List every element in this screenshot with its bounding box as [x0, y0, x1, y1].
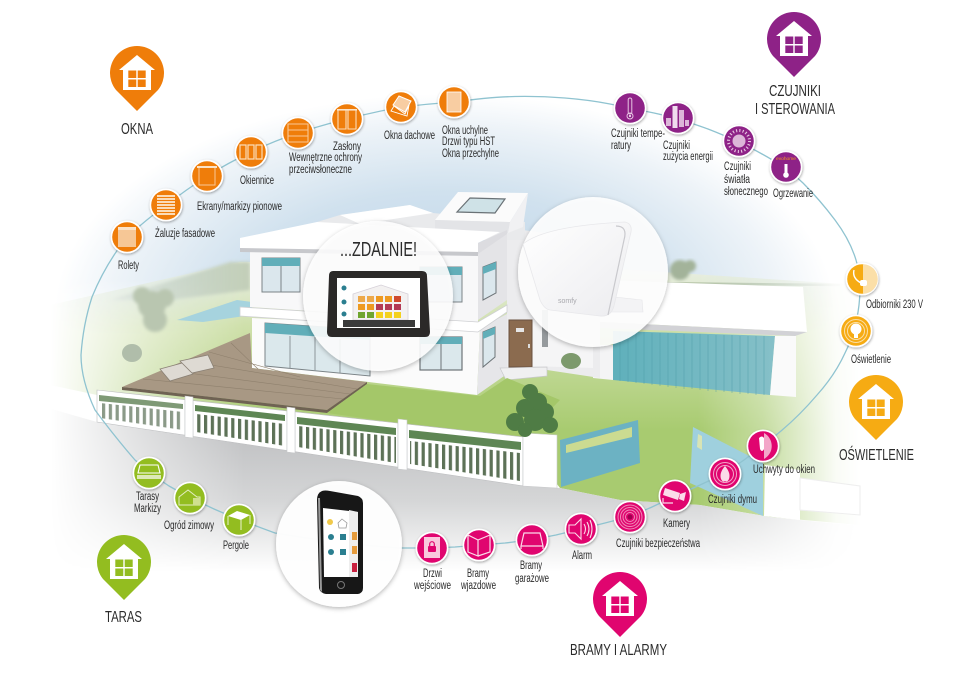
title: CZUJNIKI I STEROWANIA: CZUJNIKI — [769, 83, 821, 100]
label: Alarm: Alarm — [572, 550, 592, 562]
logo: somfy: somfy — [558, 298, 577, 305]
icon: czujnik światła słonecznego — [722, 124, 756, 158]
skylight block — [435, 192, 528, 233]
callout circle: receiver — [518, 197, 668, 347]
road — [74, 416, 810, 558]
gate right — [690, 427, 763, 516]
icon: czujniki dymu — [708, 458, 742, 490]
label: Zasłony Wewnętrzne ochrony przeciwsłoneczne: przeciwsłoneczne — [289, 164, 352, 176]
lower right window — [420, 337, 462, 370]
garage — [593, 280, 807, 397]
label: Rolety: Rolety — [118, 260, 139, 272]
icon: wewnętrzne ochrony — [282, 116, 314, 150]
icon: okna dachowe — [384, 90, 418, 124]
gate left — [560, 420, 640, 487]
label: Ogród zimowy: Ogród zimowy — [164, 520, 214, 532]
smartphone — [317, 490, 363, 594]
icon: czujniki bezpieczeństwa — [614, 500, 646, 534]
terrace deck — [122, 333, 367, 413]
small shrub by door — [561, 353, 581, 369]
icon: tarasy markizy — [132, 456, 166, 490]
tree left — [133, 287, 174, 332]
label: Odbiorniki 230 V: Odbiorniki 230 V — [866, 299, 923, 311]
title: OKNA: OKNA — [121, 121, 153, 138]
label: Okna uchylne Drzwi typu HST Okna przechylne: Drzwi typu HST — [442, 136, 495, 148]
label: Czujniki temperatury — [611, 128, 665, 152]
icon: pergole — [222, 504, 256, 536]
pink group: bramy i alarmy — [413, 430, 815, 592]
label: Czujniki zużycia energii — [663, 140, 713, 163]
icon: żaluzje — [150, 188, 182, 222]
fence — [97, 390, 557, 488]
label: Bramy garażowe: garażowe — [515, 573, 549, 585]
title: TARAS: TARAS — [105, 609, 142, 626]
lawn — [50, 262, 860, 525]
garage left pier — [593, 345, 613, 380]
icon: bramy wjazdowe — [462, 528, 496, 562]
pin: TARAS — [97, 535, 151, 626]
green group: taras — [132, 456, 256, 552]
icon: ekrany — [190, 160, 224, 192]
label: Pergole: Pergole — [223, 540, 249, 552]
icon: alarm — [564, 512, 598, 546]
icon: ogrzewanie evohome: evohome — [776, 156, 797, 161]
purple group: czujniki — [611, 92, 813, 200]
right gate post and faded fence — [764, 465, 860, 520]
label: Czujniki bezpieczeństwa: Czujniki bezpieczeństwa — [616, 538, 700, 550]
title: BRAMY I ALARMY: BRAMY I ALARMY — [570, 642, 667, 659]
garage right wall — [770, 336, 796, 397]
roof upper tier — [317, 205, 525, 240]
horizon hedge — [640, 283, 840, 285]
label: Bramy garażowe: Bramy — [520, 560, 542, 572]
tablet — [327, 271, 430, 337]
icon: uchwyty do okien — [746, 430, 780, 462]
icon: bramy garażowe — [516, 524, 548, 556]
floor slab — [240, 305, 507, 332]
icon: kamery — [658, 480, 692, 512]
label: Okiennice: Okiennice — [240, 175, 274, 187]
label: Czujniki temperatury: ratury — [611, 140, 631, 152]
lower floor walls — [252, 318, 480, 395]
label: Bramy wjazdowe — [460, 568, 496, 592]
icon: okiennice — [234, 136, 268, 168]
upper floor side wall — [478, 234, 507, 320]
heading: ...ZDALNIE!: ...ZDALNIE! — [340, 239, 417, 261]
entrance door — [509, 320, 532, 367]
label: Bramy wjazdowe: Bramy — [467, 568, 489, 580]
label: Kamery: Kamery — [663, 518, 690, 530]
title: CZUJNIKI I STEROWANIA: I STEROWANIA — [755, 101, 835, 118]
label: Okna uchylne Drzwi typu HST Okna przechylne: Okna uchylne — [442, 125, 488, 137]
label: Zasłony Wewnętrzne ochrony przeciwsłoneczne — [289, 141, 362, 176]
yellow group: oświetlenie — [840, 262, 923, 366]
label: Bramy wjazdowe: wjazdowe — [460, 580, 496, 592]
fence bars — [100, 403, 183, 430]
label: Drzwi wejściowe: wejściowe — [413, 580, 451, 592]
icon: ogrzewanie evohome — [770, 150, 802, 184]
label: Tarasy Markizy — [134, 491, 161, 515]
pin: OKNA — [110, 46, 164, 138]
label: Uchwyty do okien: Uchwyty do okien — [753, 464, 815, 476]
side window upper — [483, 262, 496, 300]
label: Czujniki temperatury: Czujniki tempe- — [611, 128, 665, 140]
rear section — [507, 228, 600, 378]
garage door — [613, 331, 775, 395]
receiver base — [600, 296, 643, 312]
sun loungers — [160, 355, 214, 381]
icon: zasłony — [330, 102, 364, 136]
roof slab — [240, 222, 500, 254]
label: Zasłony Wewnętrzne ochrony przeciwsłoneczne: Wewnętrzne ochrony — [289, 152, 362, 164]
icon: czujnik zużycia energii — [662, 102, 694, 134]
icon: rolety — [110, 220, 144, 254]
ground: lawn and road — [63, 260, 838, 558]
house — [240, 192, 600, 395]
icon: odbiorniki 230 V — [846, 262, 878, 296]
front lawn patch — [327, 378, 560, 438]
pin: OŚWIETLENIE — [839, 375, 914, 464]
label: Bramy garażowe — [515, 560, 549, 585]
pool — [177, 300, 252, 322]
icon: okna uchylne — [438, 86, 470, 118]
label: Czujniki światła słonecznego: Czujniki — [724, 161, 751, 173]
label: Tarasy Markizy: Tarasy — [136, 491, 159, 503]
upper right window — [420, 267, 462, 302]
background: sky glow — [86, 109, 804, 300]
icon: czujnik temperatury — [614, 92, 646, 124]
bush left — [122, 344, 142, 362]
label: Drzwi wejściowe: Drzwi — [423, 568, 442, 580]
lower big window — [265, 323, 370, 376]
icon: ogród zimowy — [174, 482, 206, 514]
garage roof — [600, 280, 807, 332]
label: Czujniki światła słonecznego: słonecznego — [724, 186, 768, 198]
callout circle: smartphone — [276, 481, 402, 607]
title: CZUJNIKI I STEROWANIA — [755, 83, 835, 118]
fence posts — [185, 396, 193, 438]
receiver device — [523, 222, 631, 316]
label: Tarasy Markizy: Markizy — [134, 503, 161, 515]
label: Czujniki zużycia energii: Czujniki — [663, 140, 690, 152]
tree back right — [670, 260, 696, 280]
pin: CZUJNIKI I STEROWANIA — [755, 12, 835, 118]
label: Czujniki zużycia energii: zużycia energii — [663, 151, 713, 163]
label: Żaluzje fasadowe: Żaluzje fasadowe — [155, 227, 215, 240]
pin: BRAMY I ALARMY — [570, 572, 667, 659]
label: Zasłony Wewnętrzne ochrony przeciwsłoneczne: Zasłony — [333, 141, 361, 153]
icon: oświetlenie — [840, 314, 872, 348]
label: Czujniki dymu: Czujniki dymu — [708, 494, 757, 506]
label: Drzwi wejściowe — [413, 568, 451, 592]
label: Ekrany/markizy pionowe: Ekrany/markizy pionowe — [197, 201, 282, 213]
fence panels — [97, 390, 185, 435]
upper left window — [262, 258, 300, 292]
label: Oświetlenie: Oświetlenie — [851, 354, 891, 366]
hedge strips — [99, 395, 183, 409]
side window lower — [483, 327, 495, 367]
front shrub — [506, 384, 558, 437]
title: OŚWIETLENIE: OŚWIETLENIE — [839, 445, 914, 464]
back hedge — [110, 262, 250, 300]
icon: drzwi wejściowe — [416, 532, 448, 564]
label: Okna uchylne Drzwi typu HST Okna przechylne: Okna przechylne — [442, 148, 499, 160]
label: Czujniki światła słonecznego — [724, 161, 768, 198]
upper floor front wall — [250, 247, 478, 322]
label: Okna uchylne Drzwi typu HST Okna przechylne — [442, 125, 499, 160]
label: Okna dachowe: Okna dachowe — [384, 130, 435, 142]
entrance step — [500, 367, 547, 380]
orange group: okna — [110, 86, 499, 272]
connection arc — [81, 96, 860, 548]
callout circle: tablet ...ZDALNIE! — [303, 221, 453, 371]
label: Ogrzewanie: Ogrzewanie — [773, 188, 813, 200]
label: Czujniki światła słonecznego: światła — [724, 174, 750, 186]
